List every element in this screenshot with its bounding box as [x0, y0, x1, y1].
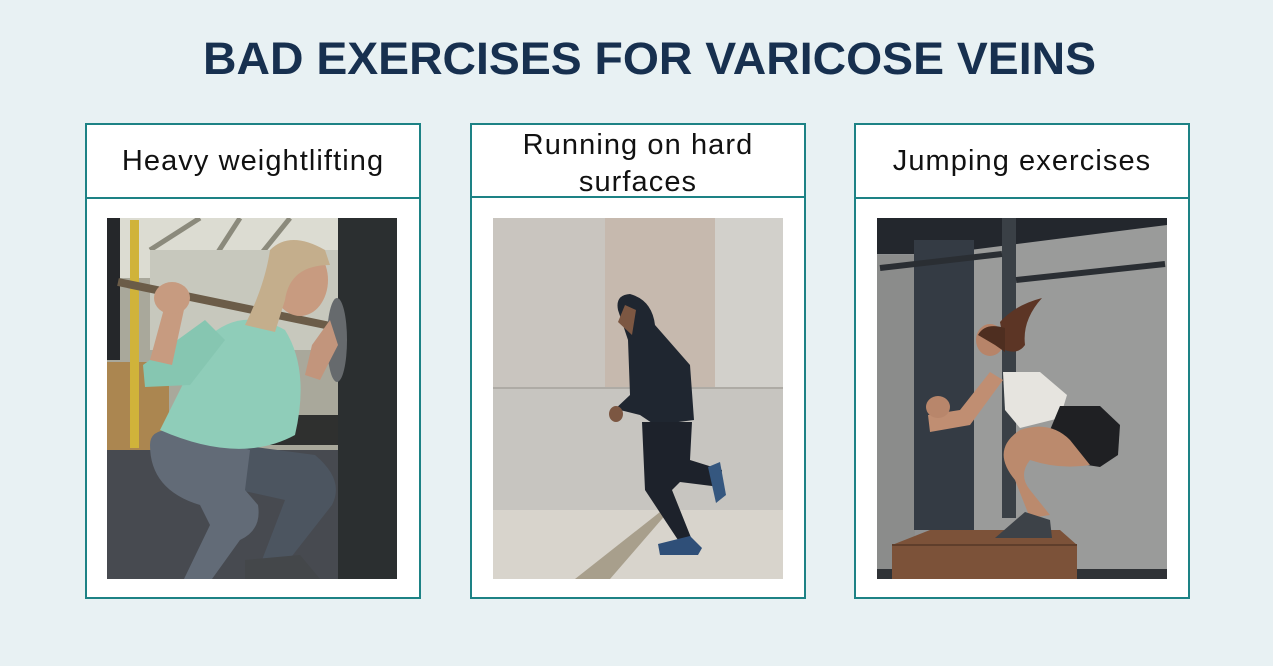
back leg [240, 445, 336, 565]
photo: woman doing box jump squat [877, 218, 1167, 579]
heading: jumping exercises: Jumping exercises [893, 144, 1151, 176]
panel: heavy weightlifting [85, 123, 421, 599]
photo: woman squatting with barbell [107, 218, 397, 579]
front leg [150, 430, 259, 579]
heading: heavy weightlifting: Heavy weightlifting [122, 144, 384, 176]
heading: heavy weightlifting [87, 125, 419, 199]
heading: jumping exercises [856, 125, 1188, 199]
heading: running on hard surfaces: Running on hard [523, 128, 753, 160]
heading: running on hard surfaces [472, 125, 804, 198]
photo: man running by concrete wall [493, 218, 783, 579]
title: BAD EXERCISES FOR VARICOSE VEINS [203, 33, 1096, 84]
heading: running on hard surfaces: surfaces [579, 166, 697, 198]
panel: jumping exercises [854, 123, 1190, 599]
panel: running on hard surfaces [470, 123, 806, 599]
